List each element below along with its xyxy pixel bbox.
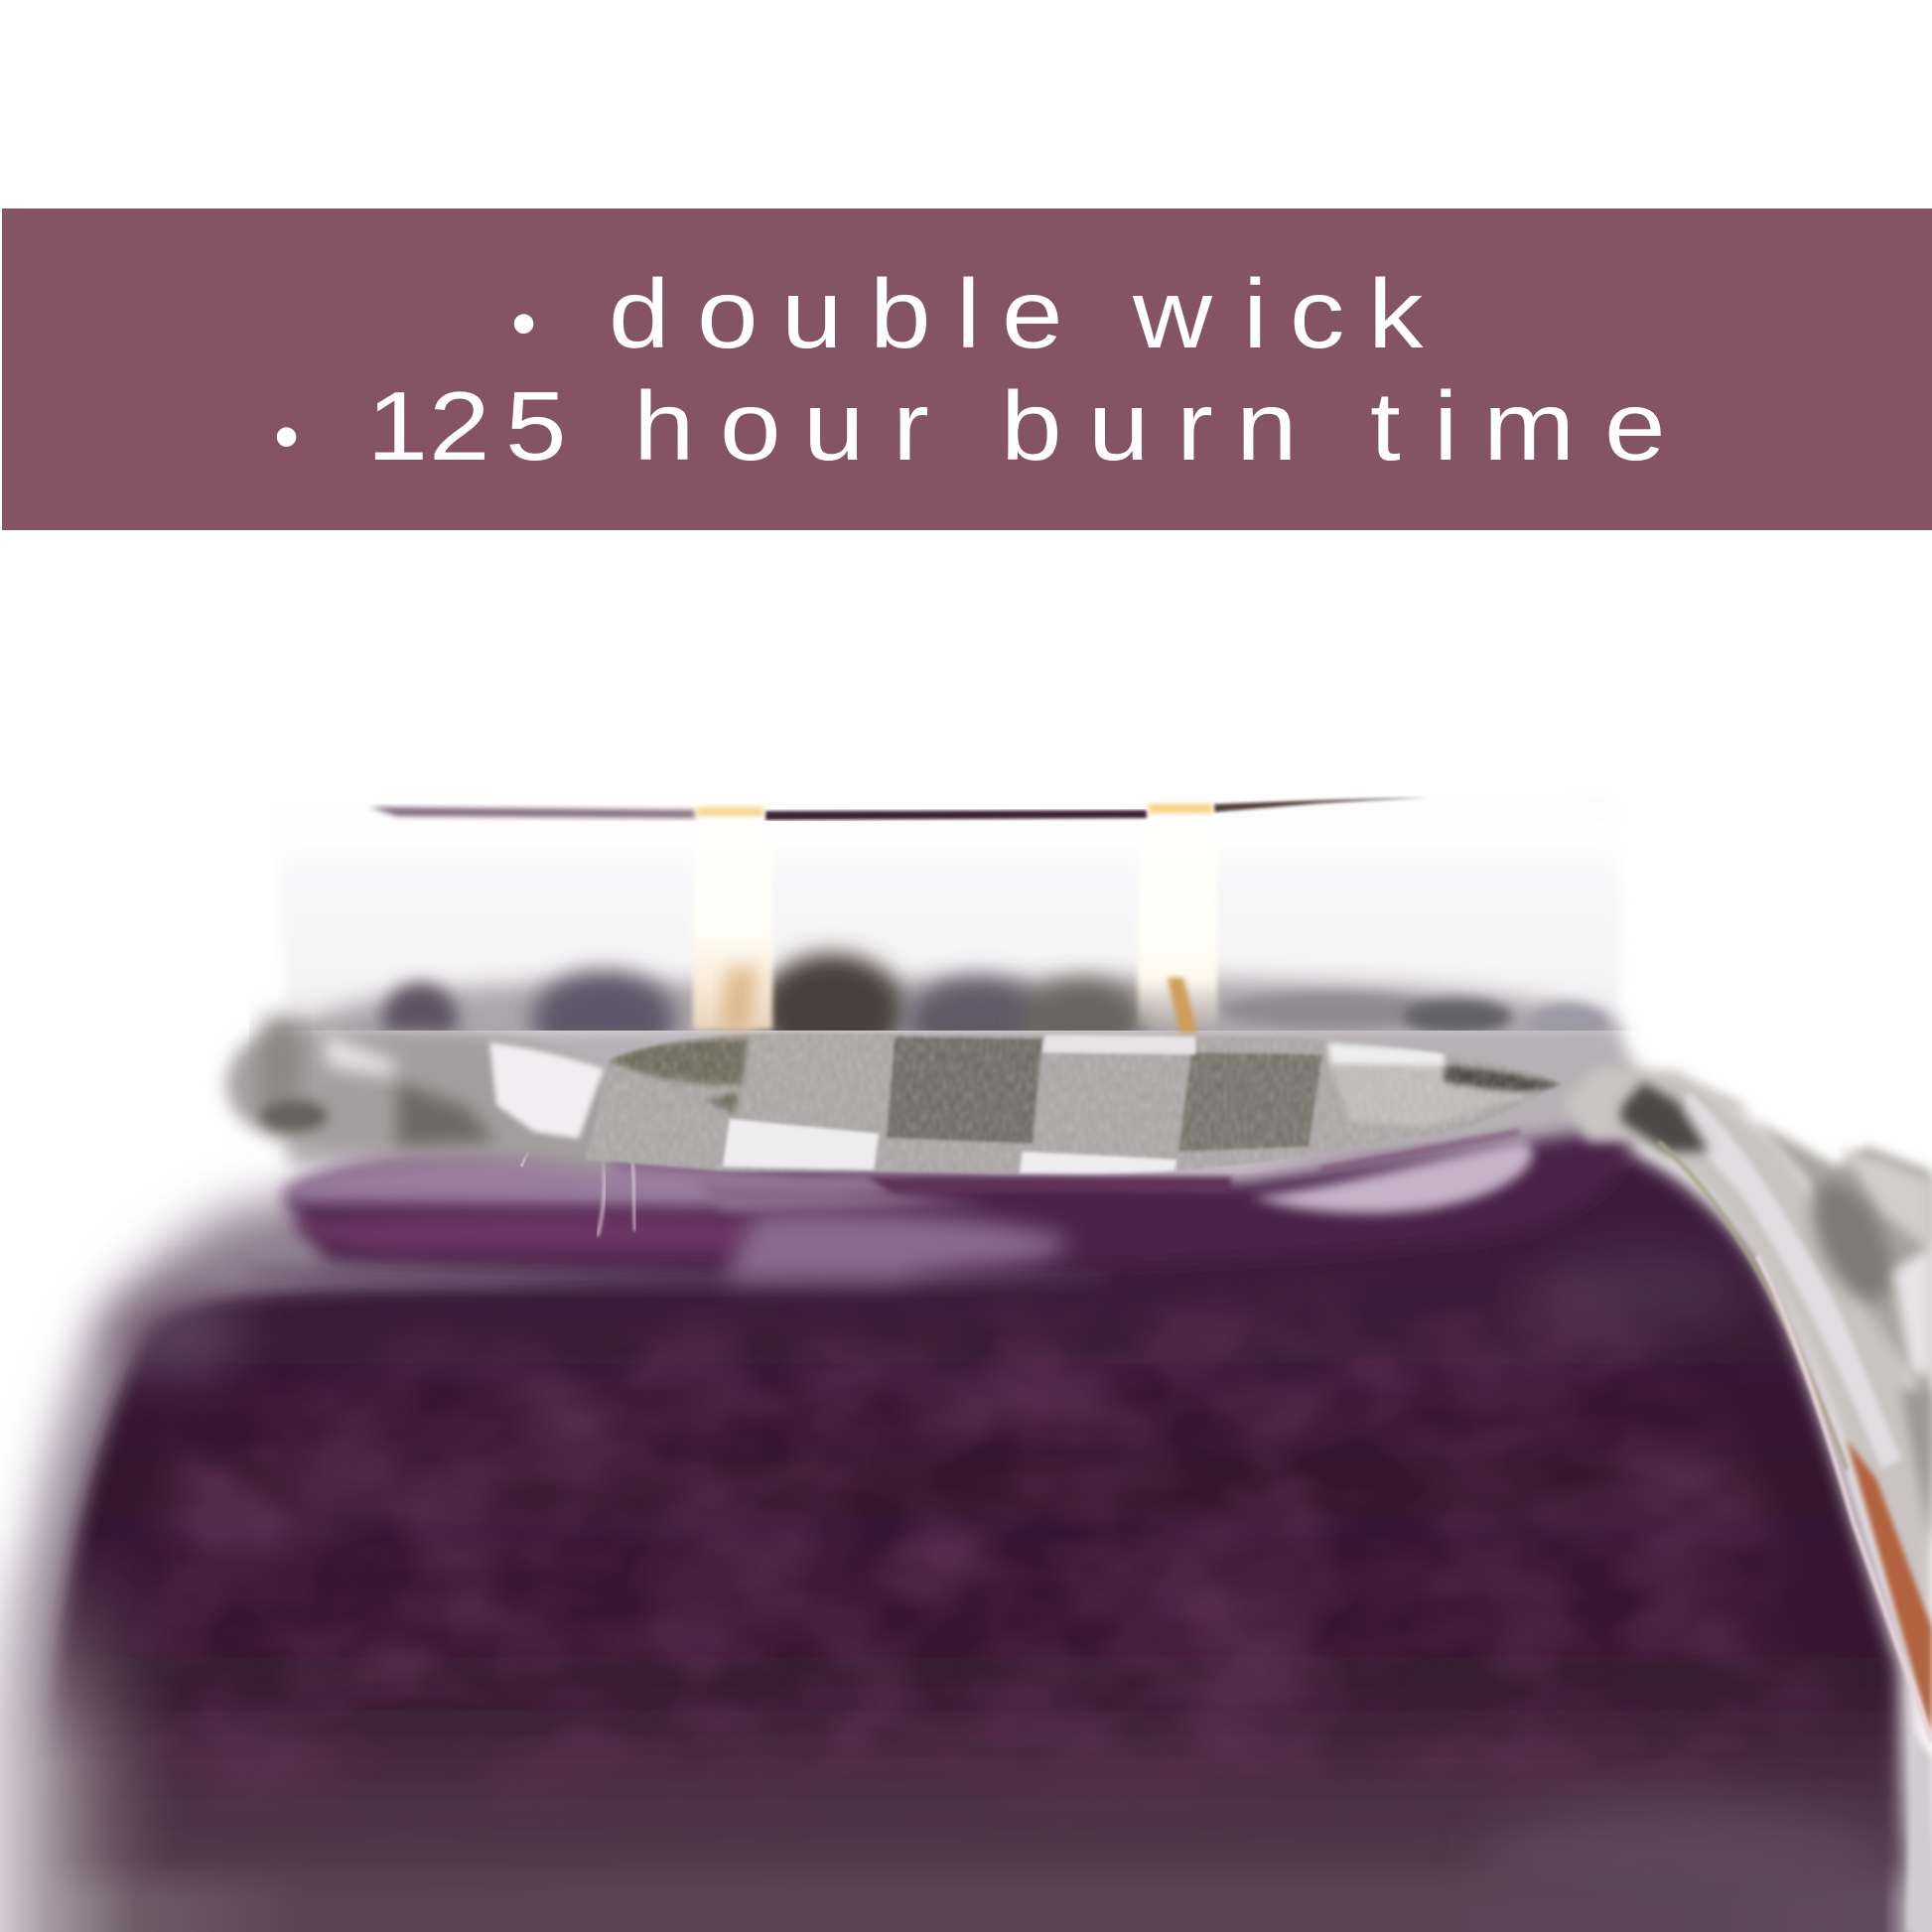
flame: right wick: [1138, 814, 1217, 1033]
flame: left wick: [693, 819, 772, 1030]
grey band behind ribbon: [283, 1023, 1648, 1167]
main gingham ribbon: [586, 1031, 1562, 1175]
banner text: double wick: double wick: [609, 260, 1424, 369]
bullet: first line: •: [511, 284, 536, 363]
dark wax blotches behind glass: [290, 933, 1629, 1031]
ribbon frayed threads: [521, 1152, 635, 1236]
glass jar upper: [276, 796, 1620, 1082]
bullet: second line: •: [274, 397, 299, 477]
banner text: 125 hour burn time: 125 hour burn time: [367, 372, 1666, 482]
left ribbon loop: [226, 1018, 635, 1173]
right ribbon tail: [1564, 1067, 1932, 1932]
wax top band: [283, 1127, 1630, 1281]
photo: candle jar: [0, 796, 1932, 1932]
jar rim line: [369, 797, 1430, 820]
shoulder haze behind body: [0, 1181, 1932, 1932]
banner: [2, 208, 1932, 530]
candle body wax: [0, 1152, 1932, 1932]
